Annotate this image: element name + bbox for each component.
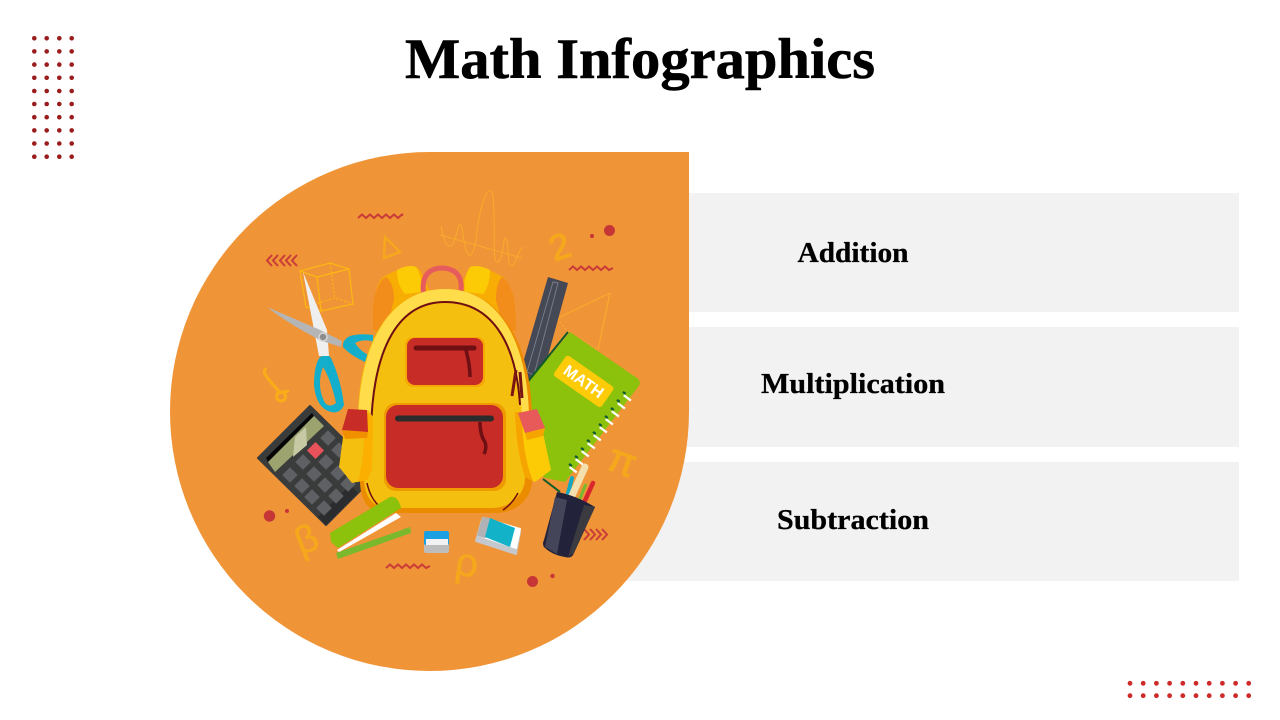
panel: multiplication [600, 327, 1239, 447]
math symbol: beta: β [289, 517, 325, 564]
panel: addition [600, 193, 1239, 312]
icon: ruler [518, 277, 568, 385]
red zigzags [267, 214, 613, 568]
left side pocket [339, 410, 373, 483]
handle [423, 268, 461, 297]
right strap [456, 266, 516, 340]
right side pocket [515, 415, 551, 482]
icon: graph wave doodle [440, 190, 523, 266]
dot grid: top left [32, 36, 74, 159]
icon: calculator [258, 406, 378, 525]
red chevrons right [584, 529, 607, 540]
math symbol: rho: ρ [453, 540, 481, 586]
spiral binding [570, 397, 628, 474]
panel: subtraction [600, 462, 1239, 581]
left strap [373, 266, 432, 340]
icon: loop symbol doodle [264, 368, 289, 401]
panel: subtraction: Subtraction [777, 504, 929, 536]
icon: triangle doodle [384, 237, 400, 258]
red dots [264, 225, 615, 587]
panel: multiplication: Multiplication [761, 368, 945, 400]
icon: triangle outline doodle [558, 293, 610, 350]
orange teardrop shape [170, 152, 689, 671]
math label [553, 355, 615, 408]
icon: backpack [339, 266, 551, 513]
calculator keys [282, 430, 359, 516]
math symbol: pi: π [602, 436, 643, 486]
icon: sharpener [424, 531, 449, 553]
red chevrons left [267, 255, 297, 266]
math doodles [264, 190, 610, 401]
math label: MATH [560, 362, 606, 402]
zip tassel [512, 370, 522, 398]
icon: stapler [330, 497, 411, 559]
icon: scissors [267, 272, 373, 412]
math symbol: two: 2 [544, 224, 576, 269]
icon: cube doodle [300, 263, 353, 311]
body [358, 289, 532, 513]
title: Math Infographics [405, 28, 875, 91]
large pocket [384, 403, 506, 491]
icon: pencil cup [543, 467, 595, 558]
dot grid: bottom right [1128, 681, 1251, 698]
icon: eraser [476, 518, 520, 554]
icon: math notebook [505, 332, 640, 492]
panel: addition: Addition [798, 237, 908, 269]
top trim [358, 289, 529, 430]
small pocket [405, 337, 485, 387]
